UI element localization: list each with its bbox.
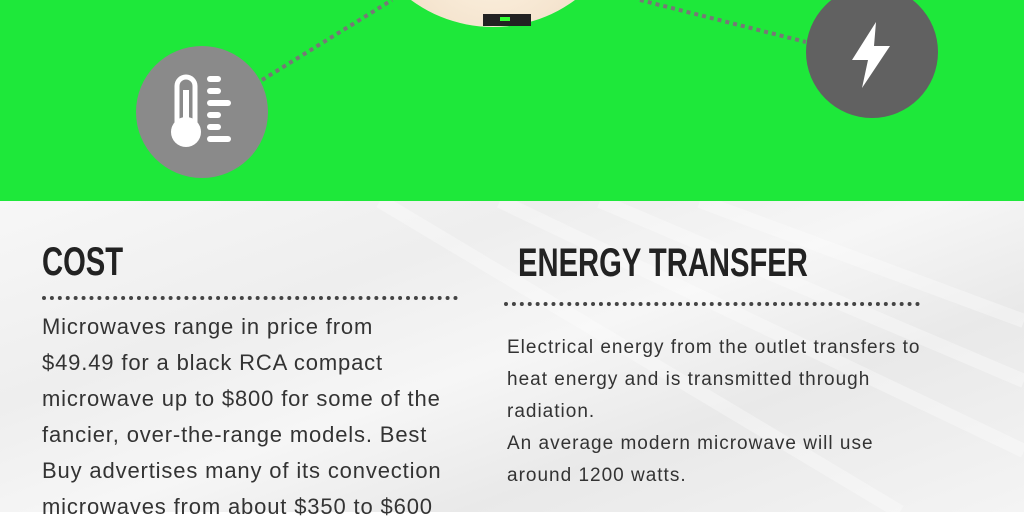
text: energy transfer: around 1200 watts. xyxy=(507,465,687,486)
heading: energy transfer: ENERGY TRANSFER xyxy=(518,241,808,285)
icon: lightning bolt xyxy=(806,0,938,118)
text: cost: $49.49 for a black RCA compact xyxy=(42,350,383,375)
microwave image circle xyxy=(355,0,631,27)
text: cost: fancier, over-the-range models. Best xyxy=(42,422,427,447)
text: cost: Microwaves range in price from xyxy=(42,314,373,339)
text: energy transfer: Electrical energy from the outlet transfers to xyxy=(507,337,920,358)
text: energy transfer: radiation. xyxy=(507,401,595,422)
text: cost: microwaves from about $350 to $600 xyxy=(42,494,433,519)
dotted connector left xyxy=(262,0,392,80)
text: cost: Buy advertises many of its convection xyxy=(42,458,442,483)
text: cost xyxy=(42,314,442,519)
heading: cost: COST xyxy=(42,240,123,284)
text: energy transfer: heat energy and is transmitted through xyxy=(507,369,870,390)
dotted connector right xyxy=(640,0,806,42)
text: energy transfer xyxy=(507,337,920,486)
bottom panel xyxy=(0,201,1024,512)
header green band xyxy=(0,0,1024,201)
icon: thermometer xyxy=(136,46,268,178)
text: energy transfer: An average modern microwave will use xyxy=(507,433,874,454)
text: cost: microwave up to $800 for some of the xyxy=(42,386,441,411)
